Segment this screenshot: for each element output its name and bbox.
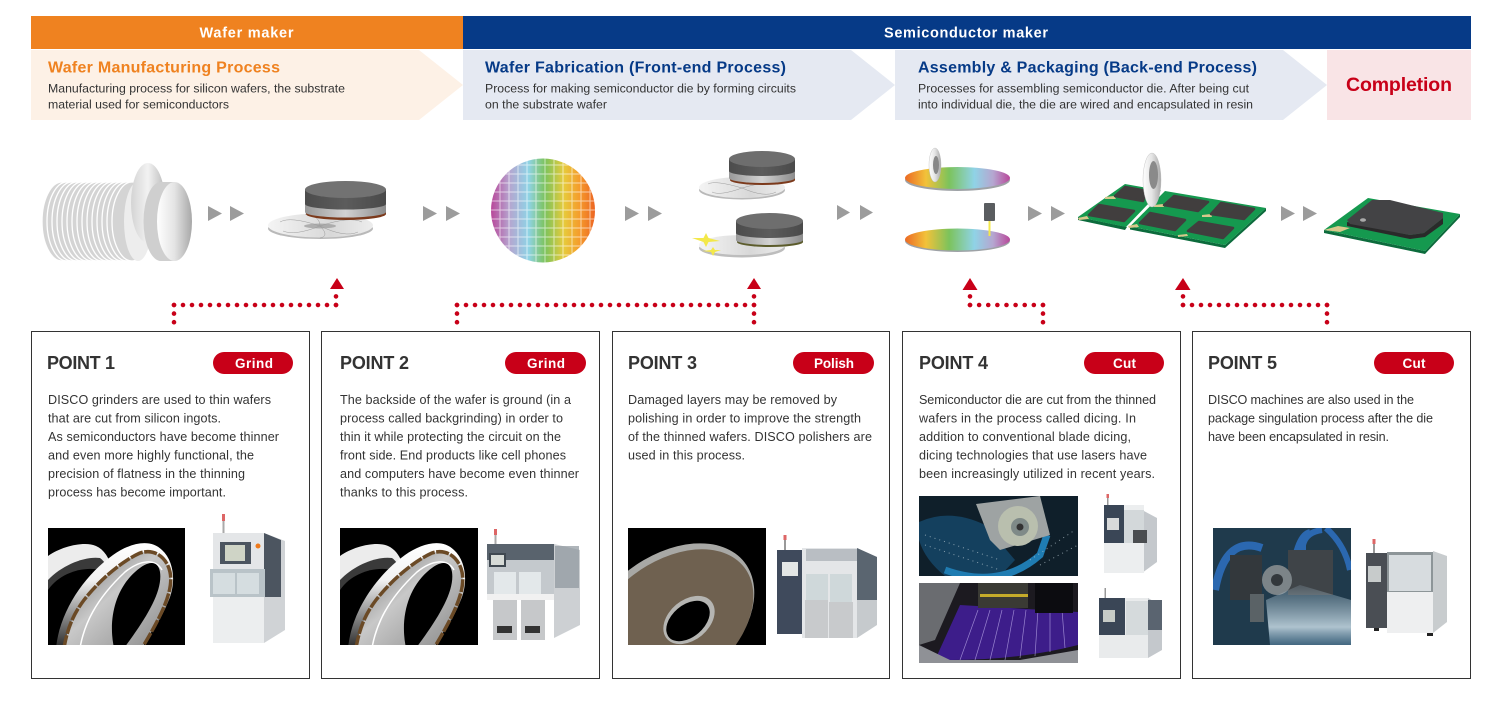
photo: laser dicing — [919, 583, 1078, 663]
tag: grind — [505, 352, 586, 374]
panel: point 4 — [902, 332, 1180, 678]
text: point 5 body — [1208, 393, 1433, 444]
panel: point 3 — [612, 331, 890, 679]
text: point 3 body: Damaged layers may be removed by — [628, 393, 838, 407]
connector: point 1 to grinding — [174, 278, 344, 323]
panel: assembly and packaging: into individual die, the die are wired and encapsulated in resin — [918, 98, 1253, 112]
text: point 5 body: package singulation process after the die — [1208, 412, 1433, 426]
connector: point 4 to dicing — [962, 278, 1044, 323]
heading: point 4: POINT 4 — [919, 353, 988, 373]
panel: wafer fabrication — [463, 50, 895, 120]
text: point 2 body: and computers have become even thinner — [340, 467, 579, 481]
text: point 2 body: thanks to this process. — [340, 486, 468, 500]
tag: grind — [213, 352, 293, 374]
text: point 2 body: process called backgrinding) in order to — [340, 412, 563, 426]
icon: blade dicing on wafer — [905, 148, 1010, 191]
arrows: process flow 5 — [1028, 206, 1065, 221]
panel: assembly and packaging — [895, 50, 1327, 120]
photo: grinder machine — [210, 514, 285, 643]
panel: wafer fabrication: Wafer Fabrication (Front-end Process) — [485, 60, 786, 76]
icon: polished wafer with sparkles — [692, 213, 803, 258]
text: point 2 body: thin it while protecting the circuit on the — [340, 430, 561, 444]
text: point 2 body: The backside of the wafer is ground (in a — [340, 393, 571, 407]
arrows: process flow 2 — [423, 206, 460, 221]
panel: assembly and packaging: Processes for assembling semiconductor die. After being cut — [918, 82, 1250, 96]
photo: laser dicer machine — [1099, 588, 1162, 658]
text: point 5 body: have been encapsulated in resin. — [1208, 430, 1389, 444]
arrows: process flow 6 — [1281, 206, 1317, 221]
tag: grind: Grind — [235, 356, 273, 371]
text: point 4 body: been increasingly utilized in recent years. — [919, 467, 1155, 481]
tag: polish — [793, 352, 874, 374]
text: point 3 body — [628, 393, 872, 462]
icon: backgrinding wafer — [699, 151, 795, 200]
photo: dicing saw machine — [1366, 539, 1447, 636]
banner: semiconductor maker — [463, 16, 1471, 49]
text: point 3 body: used in this process. — [628, 448, 745, 462]
heading: point 3: POINT 3 — [628, 353, 697, 373]
banner: wafer maker — [31, 16, 463, 49]
arrows: process flow 3 — [625, 206, 662, 221]
text: point 1 body: process has become important. — [48, 486, 226, 500]
tag: cut — [1084, 352, 1164, 374]
panel: completion: Completion — [1346, 74, 1452, 96]
icon: laser dicing on wafer — [905, 203, 1010, 252]
photo: backgrinder machine — [487, 529, 580, 640]
text: point 2 body — [340, 393, 579, 500]
tag: cut: Cut — [1113, 356, 1136, 371]
photo: blade dicing — [919, 496, 1078, 577]
icon: circuit board with chips being cut — [1078, 153, 1266, 248]
photo: polishing wheel — [628, 528, 766, 645]
text: point 1 body: that are cut from silicon ingots. — [48, 412, 221, 426]
panel: point 5 — [1192, 332, 1470, 678]
text: point 4 body: wafers in the process called dicing. In — [918, 412, 1136, 426]
panel: wafer manufacturing process: Manufacturing process for silicon wafers, the substrate — [48, 82, 345, 96]
heading: point 5: POINT 5 — [1208, 353, 1277, 373]
text: point 4 body: dicing technologies that use lasers have — [919, 448, 1147, 462]
photo: grinding wheels — [340, 528, 478, 650]
connector: point 2 to backgrinding — [457, 278, 761, 323]
panel: wafer fabrication: Process for making semiconductor die by forming circuits — [485, 82, 796, 96]
tag: grind: Grind — [527, 356, 565, 371]
text: point 1 body — [48, 393, 279, 500]
icon: silicon ingot with slices — [42, 163, 192, 261]
text: point 1 body: and even more highly functional, the — [48, 448, 254, 462]
panel: completion — [1327, 50, 1471, 120]
connector: point 5 to package singulation — [1175, 278, 1328, 323]
banner: semiconductor maker: Semiconductor maker — [884, 26, 1048, 42]
heading: point 1: POINT 1 — [47, 353, 115, 373]
icon: patterned wafer — [491, 158, 595, 263]
arrows: process flow 4 — [837, 205, 873, 220]
tag: polish: Polish — [814, 356, 854, 371]
heading: point 2: POINT 2 — [340, 353, 409, 373]
tag: cut: Cut — [1402, 356, 1426, 371]
text: point 4 body — [918, 393, 1156, 481]
panel: point 2 — [322, 332, 600, 678]
text: point 2 body: front side. End products like cell phones — [340, 448, 566, 462]
panel: point 1 — [32, 332, 310, 678]
text: point 4 body: Semiconductor die are cut from the thinned — [919, 393, 1156, 407]
text: point 3 body: of the thinned wafers. DISCO polishers are — [628, 430, 872, 444]
panel: wafer fabrication: on the substrate wafer — [485, 98, 607, 112]
photo: package singulation — [1213, 528, 1351, 645]
banner: wafer maker: Wafer maker — [200, 26, 294, 42]
text: point 1 body: precision of flatness in the thinning — [48, 467, 245, 481]
text: point 5 body: DISCO machines are also used in the — [1208, 393, 1414, 407]
icon: grinding wafer — [268, 181, 386, 239]
panel: wafer manufacturing process: material used for semiconductors — [48, 98, 229, 112]
text: point 3 body: polishing in order to improve the strength — [628, 412, 861, 426]
photo: polisher machine — [777, 535, 877, 638]
text: point 1 body: DISCO grinders are used to thin wafers — [48, 393, 271, 407]
text: point 4 body: addition to conventional blade dicing, — [919, 430, 1131, 444]
photo: grinding wheels — [48, 528, 186, 650]
photo: blade dicer machine — [1104, 494, 1157, 573]
panel: assembly and packaging: Assembly & Packaging (Back-end Process) — [918, 60, 1257, 76]
text: point 1 body: As semiconductors have become thinner — [48, 430, 279, 444]
panel: wafer manufacturing process: Wafer Manufacturing Process — [48, 60, 280, 76]
arrows: process flow 1 — [208, 206, 244, 221]
icon: finished package — [1324, 198, 1460, 254]
panel: wafer manufacturing process — [31, 50, 463, 120]
tag: cut — [1374, 352, 1454, 374]
